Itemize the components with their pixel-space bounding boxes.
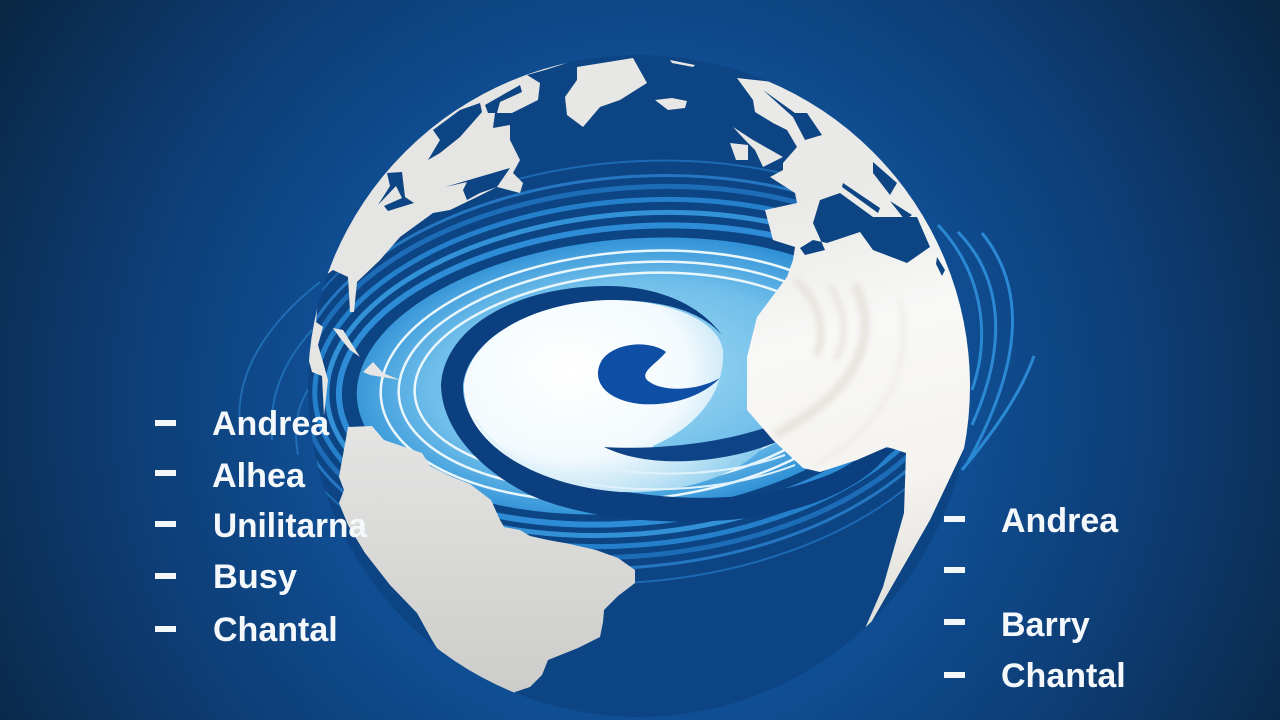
dark spiral arm xyxy=(441,286,892,522)
right labels: Barry xyxy=(1001,606,1090,644)
Adriatic and Black Sea xyxy=(842,162,912,220)
outer spiral bands xyxy=(308,160,970,584)
right labels: Chantal xyxy=(1001,657,1126,695)
light blue disc xyxy=(356,238,807,514)
continent: Europe and Africa with cloud mass xyxy=(737,78,970,628)
right labels: Andrea xyxy=(1001,502,1119,540)
hurricane spiral xyxy=(308,160,970,584)
eye xyxy=(598,344,720,404)
Great Lakes xyxy=(378,172,414,211)
left labels: Chantal xyxy=(213,611,338,649)
British Isles xyxy=(730,127,783,167)
Red Sea xyxy=(936,257,945,276)
cloud shading arcs xyxy=(774,279,904,438)
white disc rings xyxy=(379,249,794,500)
left labels: Unilitarna xyxy=(213,507,368,545)
Arctic channel xyxy=(485,85,522,113)
ocean xyxy=(308,55,970,717)
continent: South America xyxy=(339,426,635,707)
left labels: Alhea xyxy=(212,457,306,495)
core swirl lines xyxy=(476,420,795,489)
Caribbean islands xyxy=(333,328,400,380)
Baltic Sea xyxy=(763,90,822,140)
Gulf of St Lawrence xyxy=(445,168,510,200)
left labels xyxy=(212,405,368,649)
list: right names xyxy=(944,502,1126,695)
continent: North America xyxy=(290,55,570,416)
Mediterranean Sea xyxy=(800,193,930,263)
globe xyxy=(308,55,970,717)
outer swirl lines right xyxy=(938,225,1034,470)
left labels: Busy xyxy=(213,558,297,596)
list: left names xyxy=(155,405,368,649)
islands: Iceland and Svalbard xyxy=(655,60,695,110)
right labels xyxy=(1001,502,1126,695)
left labels: Andrea xyxy=(212,405,330,443)
outer swirl lines left xyxy=(239,282,320,455)
white core xyxy=(464,300,770,492)
dark inner arm xyxy=(604,428,776,462)
Greenland xyxy=(565,58,647,127)
right dashes xyxy=(944,516,965,678)
left dashes xyxy=(155,420,176,632)
Hudson Bay xyxy=(428,103,482,160)
